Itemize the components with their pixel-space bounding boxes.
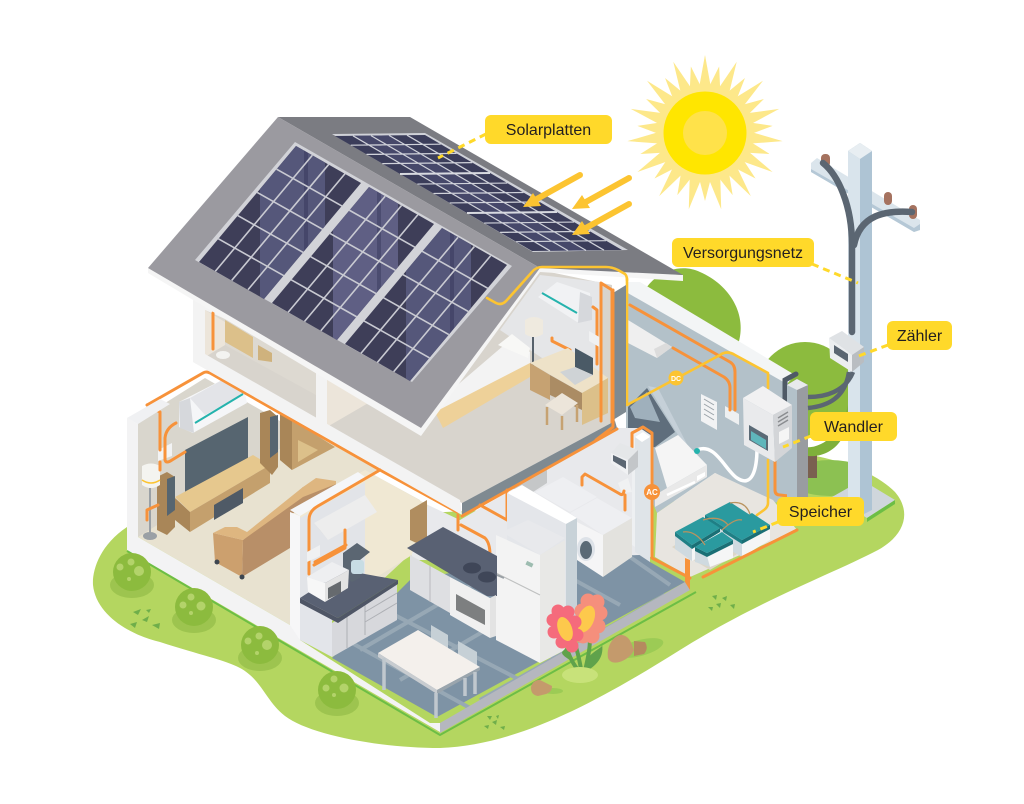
solar array small bbox=[332, 133, 628, 252]
panel two bbox=[272, 187, 434, 340]
stool bbox=[545, 393, 578, 430]
bedroom wall bbox=[500, 275, 600, 405]
utility pole bbox=[811, 143, 920, 522]
range hood bbox=[314, 495, 377, 540]
battery front bbox=[695, 532, 733, 567]
cross arm bbox=[811, 158, 920, 232]
battery cables bbox=[683, 502, 750, 545]
floor mat bbox=[672, 512, 766, 570]
arrow bbox=[572, 178, 629, 209]
speakers bbox=[157, 410, 278, 535]
cables from meter bbox=[808, 372, 853, 408]
fuse box panel and AC riser bbox=[596, 290, 797, 578]
DC badge: DC bbox=[671, 376, 681, 383]
shrubs bbox=[110, 553, 359, 716]
living room bbox=[138, 372, 457, 640]
label: Solarplatten: Solarplatten bbox=[506, 122, 591, 139]
window recess bbox=[628, 388, 675, 450]
batteries bbox=[672, 502, 770, 570]
floor bbox=[138, 430, 420, 640]
wall bbox=[138, 378, 400, 537]
flowers bbox=[546, 594, 608, 683]
pink flower bbox=[546, 604, 584, 652]
shrub bbox=[172, 588, 216, 633]
air conditioner bbox=[538, 282, 592, 323]
lamp base bbox=[216, 351, 230, 359]
shrub bbox=[110, 553, 154, 598]
floor lamp bbox=[142, 464, 160, 540]
bed bbox=[435, 334, 530, 428]
refrigerator bbox=[496, 520, 565, 663]
TV cabinet bbox=[175, 455, 270, 532]
pole shaft bbox=[848, 143, 872, 516]
power cables bbox=[823, 163, 912, 332]
chairs bbox=[431, 625, 477, 668]
tall white partition bbox=[507, 485, 577, 640]
label: Solarplatten bbox=[438, 115, 612, 158]
back room walls bbox=[626, 282, 797, 577]
socket bbox=[589, 331, 601, 348]
inverter display bbox=[749, 425, 768, 451]
upper roof plane bbox=[278, 117, 683, 275]
shrub bbox=[315, 671, 359, 716]
lower roof plane bbox=[148, 117, 540, 428]
white front edge of slab bbox=[193, 354, 462, 515]
shrub bbox=[238, 626, 282, 671]
tree behind back wall bbox=[640, 268, 741, 345]
air conditioner bbox=[179, 380, 247, 433]
dining table with chairs bbox=[378, 625, 480, 718]
front walls and foundation bbox=[127, 399, 696, 735]
cell grid bbox=[199, 146, 507, 381]
slab side band bbox=[462, 421, 617, 515]
eave white strip bbox=[148, 265, 683, 436]
washing machines bbox=[535, 474, 632, 577]
wires bbox=[458, 429, 617, 555]
panel one bbox=[199, 146, 361, 299]
cabinet beyond partition bbox=[410, 500, 427, 548]
arrow bbox=[523, 175, 580, 207]
roof bbox=[148, 117, 683, 436]
tree beside inverter bbox=[757, 342, 872, 496]
grass tufts bbox=[130, 595, 735, 730]
wall socket bbox=[725, 406, 739, 425]
battery right bbox=[723, 513, 770, 557]
back kitchen counter with stove bbox=[407, 527, 497, 638]
wire bbox=[212, 313, 214, 349]
upper floor left room bbox=[193, 290, 328, 438]
vertical orange conduit bbox=[601, 283, 612, 427]
pole base plate bbox=[832, 480, 895, 518]
front kitchen partition bbox=[290, 470, 380, 640]
AC badge: AC bbox=[646, 488, 658, 497]
living room wires bbox=[147, 372, 457, 520]
kitchen floor bbox=[332, 540, 685, 717]
front kitchen counter bbox=[300, 543, 398, 657]
fuse box bbox=[611, 443, 638, 475]
white charger unit bbox=[655, 435, 707, 488]
arrow bbox=[572, 204, 629, 235]
label: Speicher: Speicher bbox=[789, 504, 853, 521]
meter bbox=[829, 331, 864, 372]
coffee maker bbox=[343, 543, 370, 582]
DC badge bbox=[668, 370, 684, 386]
cupboard bbox=[225, 320, 253, 358]
wires bbox=[309, 470, 380, 574]
AC badge bbox=[644, 484, 660, 500]
sofa bbox=[213, 478, 336, 580]
label: Speicher bbox=[753, 497, 864, 532]
bedside lamp bbox=[525, 317, 543, 385]
burners bbox=[463, 562, 496, 582]
microwave bbox=[307, 562, 349, 602]
slab floor bbox=[328, 270, 615, 503]
sun bbox=[627, 55, 783, 211]
switch bbox=[618, 478, 632, 493]
back wall bbox=[626, 290, 788, 513]
back wall top bbox=[626, 282, 795, 384]
back wall wires bbox=[487, 253, 797, 515]
white charging cable bbox=[697, 448, 757, 481]
sun arrows bbox=[523, 175, 629, 235]
solar array large bbox=[195, 142, 512, 382]
insulators bbox=[821, 154, 917, 219]
coral flower bbox=[572, 594, 608, 644]
floor bbox=[655, 473, 797, 577]
upper floor right room and bedroom bbox=[193, 270, 626, 515]
rocks bbox=[531, 634, 665, 696]
label: Wandler bbox=[783, 412, 897, 447]
wall divider bbox=[316, 360, 328, 438]
battery left bbox=[675, 517, 720, 561]
back room air conditioner bbox=[628, 320, 672, 358]
DC wire from panels to eaves bbox=[487, 267, 627, 304]
inverter bbox=[743, 386, 792, 462]
panel three bbox=[345, 228, 507, 381]
wall pillar and conduit bbox=[785, 374, 808, 497]
label: Zähler: Zähler bbox=[897, 328, 943, 345]
wall notice bbox=[701, 394, 717, 430]
battery back bbox=[705, 502, 750, 543]
desk bbox=[530, 348, 608, 425]
label: Versorgungsnetz bbox=[672, 238, 858, 283]
sun rays bbox=[627, 55, 783, 211]
label: Zähler bbox=[856, 321, 952, 357]
television bbox=[185, 417, 248, 495]
ground: green lawn bbox=[93, 455, 904, 748]
inverter vents bbox=[778, 412, 788, 426]
label: Versorgungsnetz: Versorgungsnetz bbox=[683, 245, 803, 262]
switch bbox=[307, 545, 320, 562]
wall shadow patch bbox=[508, 470, 547, 492]
kitchen back wall bbox=[410, 421, 640, 560]
label: Wandler: Wandler bbox=[824, 419, 884, 436]
wall switch bbox=[158, 443, 172, 461]
desk wiring bbox=[552, 307, 597, 364]
bookshelf bbox=[280, 412, 335, 470]
laptop bbox=[560, 348, 593, 385]
grey wall column bbox=[613, 285, 626, 420]
